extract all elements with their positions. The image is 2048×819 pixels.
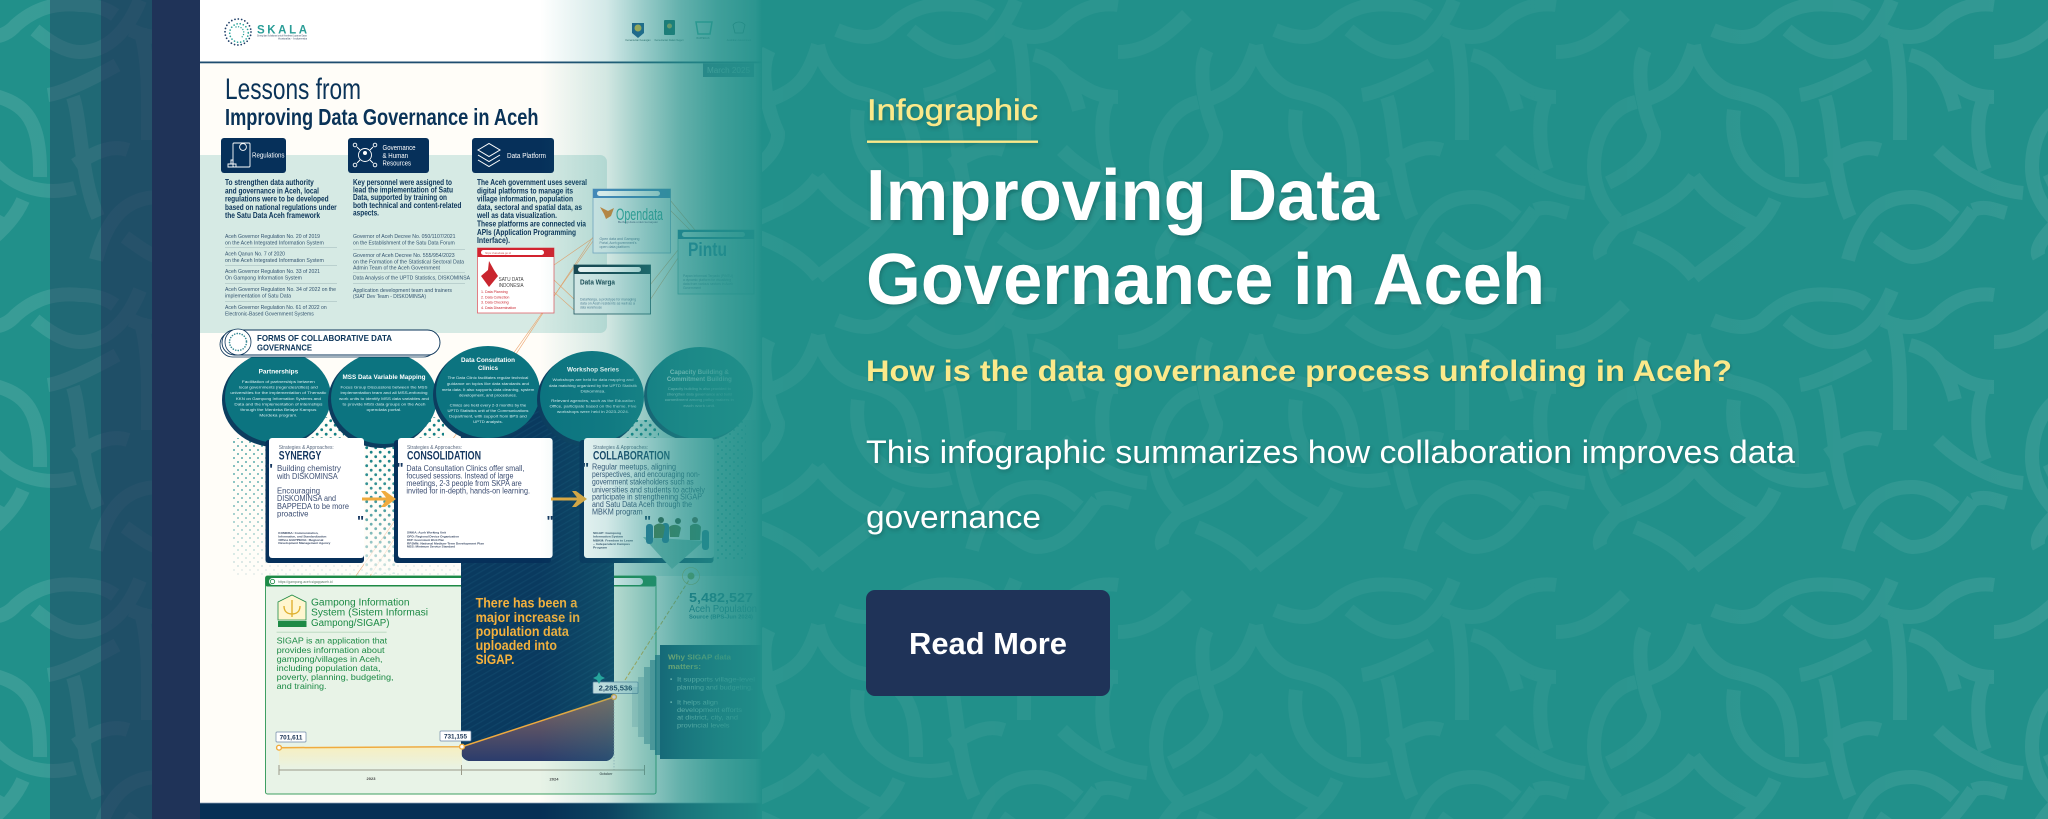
poster header band: [200, 0, 762, 63]
column 2 text: Data Analysis of the UPTD Statistics, DISKOMINSA: [353, 276, 470, 282]
population line chart: 2024: [550, 776, 559, 782]
card: Collaboration: MBKM: Freedom to Learn: [593, 538, 633, 542]
circle: Data Consultation Clinics: meta data. It also supports data cleaning, system: [442, 387, 535, 392]
card: Collaboration: COLLABORATION: [593, 448, 670, 462]
column 2 text: Governor of Aceh Decree No. 555/954/2023: [353, 253, 455, 259]
window: Pintu: a dynamic platform for visualizing: [683, 277, 731, 282]
main headline: [866, 156, 1545, 320]
poster fade overlay: [540, 0, 762, 819]
main headline: Governance in Aceh: [866, 240, 1545, 320]
column 2 text: Key personnel were assigned to: [353, 178, 452, 187]
callout text: uploaded into: [476, 638, 557, 653]
circle: Capacity Building: each work unit.: [683, 403, 715, 408]
column 1 text: Aceh Governor Regulation No. 20 of 2019: [225, 234, 320, 240]
column 3 text: These platforms are connected via: [477, 220, 586, 229]
partner logos: Kementerian Dalam Negeri: [655, 39, 684, 42]
card: Collaboration: ": [644, 513, 651, 530]
column 2 text: Governor of Aceh Decree No. 050/1107/2021: [353, 234, 456, 240]
window: Pintu: data from various sectors in Aceh: [683, 281, 733, 286]
illustration: people at a table: [643, 517, 709, 569]
panel: Why SIGAP data matters: It supports village-level: [677, 676, 756, 684]
SIGAP description: SIGAP is an application that: [277, 636, 388, 646]
mint panel: [200, 155, 607, 333]
column 3 text: Interface).: [477, 236, 510, 245]
SKALA logo: Australia - Indonesia: [278, 38, 308, 40]
card: Synergy: DISKOMINSA and: [277, 494, 336, 503]
SIGAP heading: [311, 598, 428, 629]
circle: Data Consultation Clinics: The Data Clinic facilitates regular technical: [448, 375, 528, 380]
circle: Capacity Building: Capacity Building &: [670, 369, 729, 376]
column 3 text: APIs (Application Programming: [477, 228, 576, 237]
card: Collaboration: government stakeholders such as: [592, 478, 694, 487]
card: Synergy: Office BAPPEDA: Regional: [278, 538, 324, 542]
column 1 text: Aceh Governor Regulation No. 33 of 2021: [225, 269, 320, 275]
circle: Partnerships: Merdeka program.: [259, 412, 297, 418]
window: Opendata: Berbagi data untuk kemajuan: [618, 220, 658, 224]
SIGAP description: poverty, planning, budgeting,: [277, 672, 394, 682]
icon box: data platform: Data Platform: [507, 153, 546, 160]
window: Satu Data Indonesia: [478, 248, 554, 313]
circle: Data Consultation Clinics: Data Consultation: [461, 357, 515, 364]
Aceh population stat: Aceh Population: [689, 604, 757, 615]
circle: Partnerships: Partnerships: [259, 368, 299, 376]
partner logos: Kementerian Keuangan: [625, 39, 651, 42]
card: Collaboration: Program: [593, 546, 607, 550]
SIGAP heading: System (Sistem Informasi: [311, 608, 428, 618]
card: Synergy: SYNERGY: [279, 448, 321, 462]
column 2 text: both technical and content-related: [353, 201, 461, 210]
icon box: governance: Resources: [382, 160, 411, 168]
window: Satu Data Indonesia: 2. Data Collection: [481, 295, 509, 299]
window: Data Warga: data on Aceh residents as well as a: [580, 300, 636, 306]
circle: Partnerships: KKN on Gampong Information Systems and: [236, 396, 321, 401]
card: Synergy: BAPPEDA to be more: [277, 502, 349, 511]
card: Collaboration: participate in strengthening SIGAP: [592, 492, 702, 501]
poster title: Improving Data Governance in Aceh: [225, 104, 538, 130]
window: Satu Data Indonesia: SATU DATA: [499, 277, 524, 283]
icon: Gampong crest: [278, 595, 306, 627]
pale mint backdrop: [614, 420, 762, 576]
column 2 text: lead the implementation of Satu: [353, 186, 453, 195]
SIGAP description: [277, 632, 394, 691]
section heading pill: GOVERNANCE: [257, 344, 313, 352]
card: Synergy: KOMINSA: Communication,: [278, 531, 319, 535]
circle: Workshop Series: data matching organized by the UPTD Statistik: [549, 383, 637, 388]
callout text: major increase in: [476, 610, 580, 625]
circle: Data Consultation Clinics: UPTD Statistics unit of the Communications: [448, 408, 528, 413]
callout text: There has been a: [476, 596, 578, 610]
SIGAP description: and training.: [277, 681, 327, 691]
subheading question: How is the data governance process unfolding in Aceh?: [866, 355, 1732, 388]
SKALA logo: SKALA: [257, 24, 307, 36]
panel: Why SIGAP data matters: [632, 645, 762, 759]
panel: Why SIGAP data matters: •: [670, 700, 673, 706]
window: Pintu: Papan Informasi Terpadu (PINTU): [683, 273, 734, 278]
column 2 text: Data, supported by training on: [353, 193, 447, 202]
column 1 text: on the Aceh Integrated Information System: [225, 240, 324, 246]
card: Consolidation: CONSOLIDATION: [407, 448, 481, 462]
column 2 text: on the Establishment of the Satu Data Forum: [353, 240, 455, 246]
card: Synergy: Building chemistry: [277, 464, 341, 473]
summary paragraph: This infographic summarizes how collaboration improves data: [866, 434, 1795, 470]
icon box: regulations: Regulations: [252, 152, 285, 160]
card: Consolidation: MSS: Minimum Service Standard: [407, 545, 455, 549]
window: Satu Data Indonesia: https://satudata.go.id: [485, 251, 511, 255]
circle: MSS Data Variable Mapping: to provide MSS data groups on the Aceh: [342, 402, 426, 406]
card: Consolidation: SWKA: Aceh Working Unit: [407, 531, 446, 535]
card: Synergy: proactive: [277, 510, 309, 518]
column 1 text: based on national regulations under: [225, 203, 337, 212]
card: Consolidation: meetings, 2-3 people from SKPA are: [406, 479, 522, 488]
column 1 text: Aceh Governor Regulation No. 61 of 2022 on: [225, 305, 327, 311]
circle: MSS Data Variable Mapping: work units to identify MSS data variables and: [339, 396, 429, 401]
column 1 text: the Satu Data Aceh framework: [225, 211, 320, 220]
column 1 text: [225, 178, 337, 317]
circle: Workshop Series: Relevant agencies, such as the Education: [551, 398, 635, 403]
summary paragraph: [866, 434, 1795, 535]
poster footer band: [200, 802, 762, 819]
panel: Why SIGAP data matters: development efforts: [677, 707, 743, 714]
circle: Data Consultation Clinics: UPTD analysts.: [473, 419, 503, 424]
poster title: [225, 73, 538, 130]
card: Collaboration: Strategies & Approaches:: [593, 445, 648, 451]
dot fields: [232, 417, 746, 576]
window: Opendata: open data platform: [600, 244, 630, 249]
card: Collaboration: perspectives, and encouraging non-: [592, 470, 700, 479]
card: Synergy: Development Management Agency: [278, 541, 331, 545]
panel: Why SIGAP data matters: planning and budgeting.: [677, 684, 753, 692]
poster title: Lessons from: [225, 73, 361, 106]
column 3 text: data, sectoral and spatial data, as: [477, 203, 582, 212]
icon: location pin: [682, 568, 700, 584]
circle: Workshop Series: Workshop Series: [567, 366, 619, 374]
card: Consolidation: Strategies & Approaches:: [407, 445, 462, 451]
population line chart: 2023: [367, 776, 376, 781]
window: Data Warga: DataWarga, a prototype for managing: [580, 296, 636, 302]
panel: Why SIGAP data matters: matters:: [668, 662, 701, 671]
circle: Data Consultation Clinics: Department, with support from BPS and: [449, 414, 527, 418]
section heading pill: FORMS OF COLLABORATIVE DATA: [257, 334, 392, 343]
callout text: population data: [476, 624, 569, 639]
card: Consolidation: Data Consultation Clinics offer small,: [406, 464, 524, 473]
SIGAP heading: Gampong Information: [311, 598, 410, 608]
column 1 text: Electronic-Based Government Systems: [225, 311, 314, 317]
arrow: consolidation to collaboration: [551, 491, 587, 507]
SIGAP description: provides information about: [277, 645, 385, 655]
circle: Data Consultation Clinics: [433, 346, 540, 442]
circle: Data Consultation Clinics: Clinics: [478, 365, 498, 372]
card: Synergy: with DISKOMINSA: [276, 472, 338, 481]
Aceh population stat: Source (BPS-Jun 2024): [689, 614, 753, 620]
card: Consolidation: ": [546, 513, 554, 530]
card: Synergy: Information, and Standardization: [278, 534, 327, 538]
icon box: data platform: [472, 138, 554, 173]
circle: Capacity Building: commitment among policy makers in: [665, 397, 734, 402]
circle: Data Consultation Clinics: Clinics are held every 2-3 months by the: [450, 402, 527, 408]
window: Opendata: Portal, Aceh government's: [600, 240, 636, 245]
panel: SIGAP application window: [266, 576, 656, 794]
window: Opendata: [593, 189, 670, 253]
population line chart: [276, 672, 644, 782]
window: Data Warga: Data Warga: [580, 280, 615, 286]
column 1 text: Aceh Qanun No. 7 of 2020: [225, 251, 285, 257]
poster background: [200, 63, 762, 819]
circle: Workshop Series: Diskominsa.: [580, 388, 606, 394]
card: Collaboration: Regular meetups, aligning: [592, 462, 676, 471]
partner logos: [625, 20, 752, 42]
circle: Partnerships: Facilitation of partnerships between: [242, 379, 315, 384]
card: Collaboration: – Independent Campus: [593, 542, 630, 546]
window: Satu Data Indonesia: 1. Data Planning: [481, 290, 508, 294]
card: Consolidation: RKP: Government Work Plan: [407, 538, 444, 542]
window: Pintu: Government: [683, 285, 702, 290]
circle: Partnerships: local governments (regencies/cities) and: [239, 384, 318, 390]
section heading pill: [220, 329, 440, 357]
population line chart: 2,285,536: [599, 684, 632, 692]
SIGAP description: including population data,: [277, 663, 381, 673]
icon box: governance: Governance: [382, 145, 416, 152]
column 3 text: village information, population: [477, 195, 573, 204]
SIGAP heading: Gampong/SIGAP): [311, 618, 390, 629]
circle: MSS Data Variable Mapping: MSS Data Variable Mapping: [342, 374, 426, 381]
icon box: governance: & Human: [382, 153, 408, 160]
column 2 text: Application development team and trainers: [353, 288, 452, 294]
partner logos: BAPPENAS: [697, 37, 710, 40]
window: Satu Data Indonesia: 3. Data Checking: [481, 301, 509, 305]
arrow: synergy to consolidation: [362, 491, 396, 507]
population line chart: October: [600, 772, 613, 776]
panel: Why SIGAP data matters: at district, city, and: [677, 714, 738, 722]
circle: Partnerships: through the Merdeka Belajar Kampus: [240, 407, 316, 412]
column 3 text: digital platforms to manage its: [477, 187, 573, 196]
card: Synergy: Strategies & Approaches:: [279, 445, 334, 451]
column 1 text: regulations were to be developed: [225, 195, 329, 204]
window: Satu Data Indonesia: 4. Data Dissemination: [481, 306, 516, 310]
column 1 text: and governance in Aceh, local: [225, 186, 319, 195]
circle: Workshop Series: Workshops are held for data mapping and: [552, 377, 634, 382]
card: Collaboration: SIGAP: Gampong: [593, 531, 621, 535]
circle: Data Consultation Clinics: development, and procedures.: [459, 392, 517, 398]
window: Data Warga: data warehouse: [580, 304, 603, 310]
circle: Partnerships: Data and the implementation of internships: [234, 402, 322, 406]
column 1 text: Aceh Governor Regulation No. 34 of 2022 on the: [225, 287, 336, 293]
circle: Partnerships: [222, 351, 331, 447]
Aceh population stat: 5,482,527: [689, 590, 753, 605]
circle: Capacity Building: Capacity building is also provided to: [668, 386, 732, 391]
card: Synergy: ": [357, 513, 364, 530]
left strips: [50, 0, 200, 819]
read more button: Read More: [909, 626, 1067, 661]
card: Consolidation: [394, 438, 554, 563]
SIGAP description: gampong/villages in Aceh,: [277, 654, 383, 664]
column 1 text: On Gampong Information System: [225, 275, 302, 281]
column 3 text: The Aceh government uses several: [477, 178, 587, 187]
window: Pintu: Pintu: [688, 240, 727, 261]
connector lines: [355, 200, 695, 577]
date tag: [703, 64, 754, 77]
Aceh population stat: [689, 590, 757, 620]
panel: Why SIGAP data matters: Why SIGAP data: [668, 652, 732, 662]
card: Consolidation: focused sessions. Instead of large: [406, 471, 514, 480]
column 2 text: (SIAT Dev Team - DISKOMINSA): [353, 294, 426, 300]
column 2 text: aspects.: [353, 209, 379, 218]
circle: Partnerships: universities for the implementation of Thematic: [230, 390, 326, 395]
SKALA logo: Sinergi dan Kolaborasi untuk Akselerasi Layanan Dasar: [257, 34, 307, 38]
card: Consolidation: invited for in-depth, hands-on learning.: [406, 487, 530, 496]
window: Satu Data Indonesia: INDONESIA: [499, 283, 524, 289]
circle: MSS Data Variable Mapping: opendata portal.: [366, 407, 402, 412]
column 3 text: [476, 178, 587, 245]
window: Data Warga: [574, 265, 650, 314]
window: Opendata: Opendata: [616, 205, 663, 224]
window: Pintu: [678, 230, 754, 294]
dashed link to population pin: [625, 577, 691, 680]
column 2 text: [353, 178, 470, 300]
window: Opendata: Open data and Gampong: [600, 236, 640, 241]
column 1 text: on the Aceh Integrated Information System: [225, 258, 324, 264]
circle: MSS Data Variable Mapping: Focus Group Discussions between the MSS: [340, 384, 428, 390]
card: Collaboration: MBKM program: [592, 508, 643, 517]
column 2 text: Admin Team of the Aceh Government: [353, 265, 440, 271]
panel: SIGAP application window: https://gampong.aceh.sigappaceh.id: [278, 580, 333, 584]
population line chart: 731,155: [444, 734, 467, 740]
card: Collaboration: Information System: [593, 534, 623, 538]
circle: Capacity Building: Commitment Building: [667, 376, 732, 383]
callout text: SIGAP.: [476, 652, 514, 667]
column 3 text: well as data visualization.: [476, 211, 557, 220]
panel: Why SIGAP data matters: •: [670, 676, 673, 684]
card: Collaboration: ": [582, 460, 589, 477]
label: Infographic: Infographic: [867, 94, 1038, 127]
circle: Capacity Building: [644, 347, 753, 442]
summary paragraph: governance: [866, 499, 1041, 535]
read more button: [866, 590, 1110, 696]
circle: Capacity Building: strengthen data governance and build: [667, 392, 732, 396]
column 1 text: To strengthen data authority: [225, 178, 314, 187]
icon box: regulations: [221, 138, 286, 173]
main headline: Improving Data: [866, 156, 1380, 236]
circle: Workshop Series: [537, 351, 644, 447]
card: Collaboration: and Satu Data Aceh through the: [592, 500, 692, 509]
card: Synergy: Encouraging: [277, 486, 320, 496]
circle: Data Consultation Clinics: guidance on topics like data standards and: [447, 381, 529, 386]
callout text: [476, 596, 580, 667]
card: Consolidation: RPJMN: National Medium-Term Development Plan: [407, 541, 484, 545]
card: Synergy: ": [266, 461, 273, 478]
card: Collaboration: [580, 438, 714, 569]
column 1 text: implementation of Satu Data: [225, 293, 292, 299]
navy callout block: [461, 400, 614, 761]
population line chart: 701,611: [280, 734, 303, 742]
partner logos: Australian Government: [727, 39, 752, 42]
circle: MSS Data Variable Mapping: [328, 352, 437, 448]
card: Collaboration: universities and students to actively: [592, 485, 705, 494]
panel: Why SIGAP data matters: It helps align: [677, 700, 718, 706]
card: Consolidation: OPD: Regional Device Organization: [407, 534, 459, 538]
column 2 text: on the Formation of the Statistical Sectoral Data: [353, 259, 465, 265]
circle: Workshop Series: Office, participate based on the theme. Five: [550, 404, 637, 408]
circle: Workshop Series: workshops were held in 2023-2024.: [557, 409, 629, 414]
date tag: March 2025: [707, 66, 751, 75]
card: Synergy: [266, 438, 364, 563]
SKALA logo: [225, 19, 308, 45]
card: Consolidation: ": [396, 460, 404, 477]
panel: Why SIGAP data matters: provincial levels: [677, 722, 730, 730]
icon box: governance: [348, 138, 429, 173]
infographic poster preview: [200, 0, 762, 819]
circle: MSS Data Variable Mapping: implementation team and all MSS-enforcing: [340, 390, 428, 395]
